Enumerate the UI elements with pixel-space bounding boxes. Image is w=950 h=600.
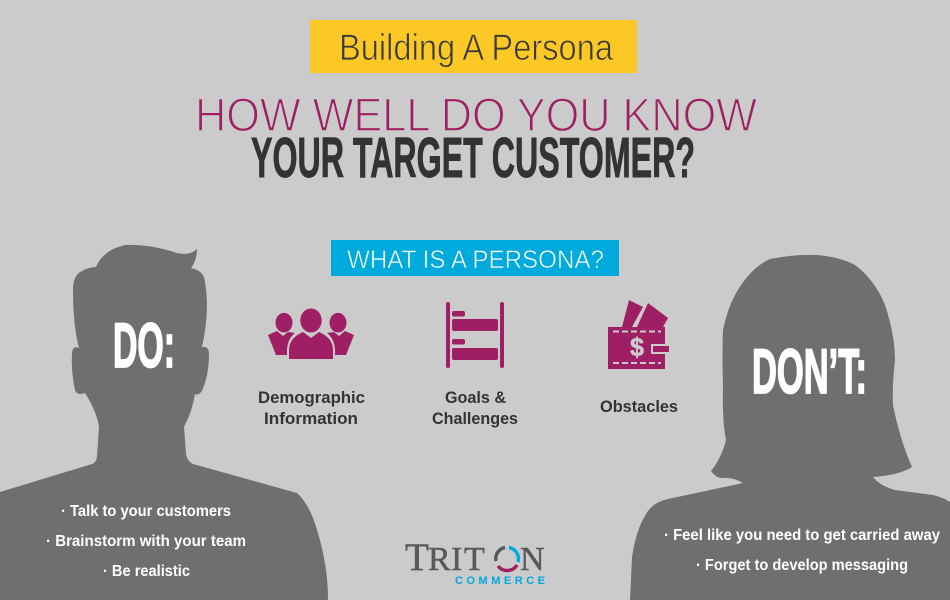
woman silhouette: [630, 255, 950, 600]
label: Demographic: [258, 388, 365, 407]
wordmark: T: [464, 541, 485, 578]
do list: · Brainstorm with your team: [46, 533, 246, 550]
item: demographic information: [258, 308, 365, 428]
don't list: · Feel like you need to get carried away: [664, 527, 940, 544]
logo ring: [496, 548, 518, 571]
tagline: COMMERCE: [455, 575, 545, 587]
heading badge: Building A Persona: Building A Persona: [339, 27, 613, 68]
item: obstacles: [600, 300, 678, 416]
wordmark: T: [405, 536, 429, 579]
panel: do silhouette: [0, 245, 328, 600]
title line: How well do you know: HOW WELL DO YOU KNOW: [195, 88, 758, 141]
label: Challenges: [432, 409, 518, 428]
icon: bar abacus: [446, 302, 504, 368]
icon: wallet: $: [630, 332, 645, 362]
wordmark: R: [428, 541, 451, 578]
wordmark: N: [520, 541, 545, 578]
wordmark: I: [451, 541, 462, 578]
label: Obstacles: [600, 397, 678, 416]
don't list: [664, 527, 940, 574]
don't list: · Forget to develop messaging: [696, 557, 908, 574]
do list: · Be realistic: [103, 563, 190, 580]
do heading: DO:: [113, 311, 175, 381]
panel: don't silhouette: [630, 255, 950, 600]
subheading badge: What is a persona: WHAT IS A PERSONA?: [347, 246, 604, 274]
label: [258, 388, 365, 428]
do list: [46, 503, 246, 580]
item: goals and challenges: [432, 302, 518, 428]
label: Goals &: [445, 388, 506, 407]
heading badge: Building A Persona: [310, 20, 637, 73]
label: [432, 388, 518, 428]
logo: Triton Commerce: [405, 536, 545, 587]
do list: · Talk to your customers: [61, 503, 231, 520]
man silhouette: [0, 245, 328, 600]
label: Information: [264, 409, 358, 428]
icon: group of people: [268, 308, 354, 359]
wordmark: O: [496, 541, 521, 578]
